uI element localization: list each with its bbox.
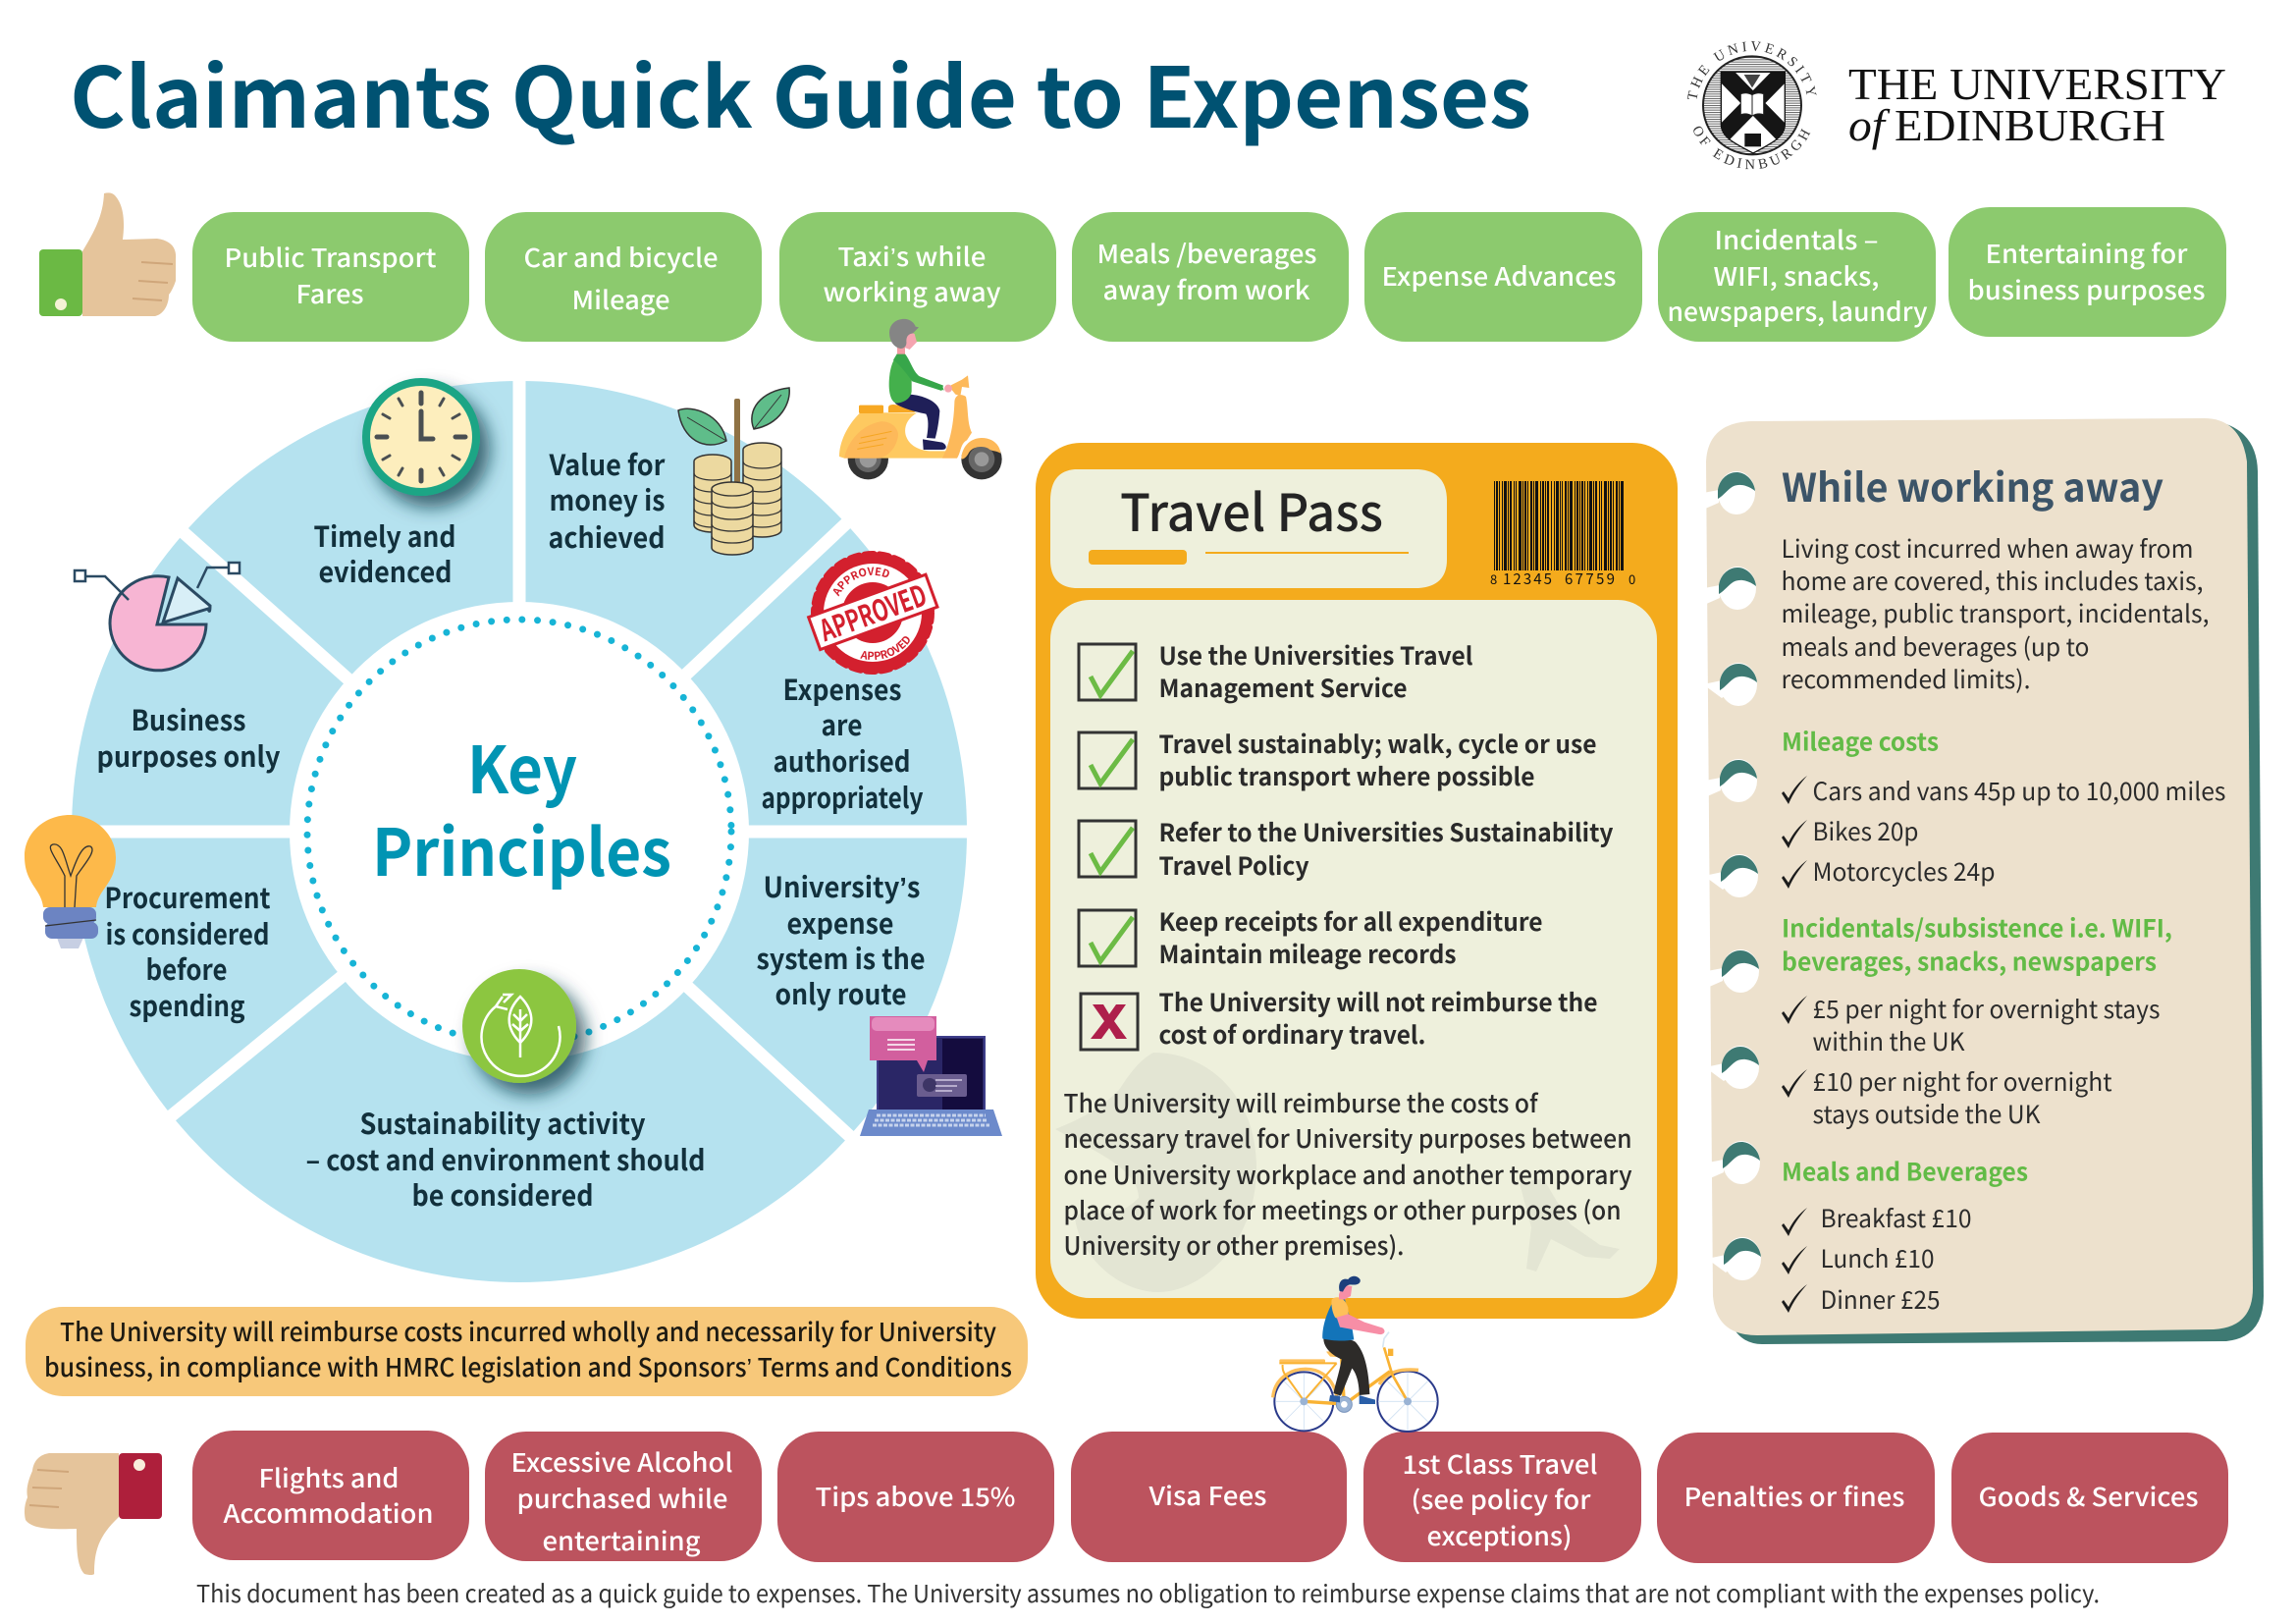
principle: procurement: spending bbox=[130, 984, 245, 1025]
pill: meals bbox=[1072, 212, 1349, 342]
notebook heading: While working away bbox=[1782, 457, 2163, 514]
pill: goods and services bbox=[1951, 1433, 2228, 1563]
logo wordmark: EDINBURGH bbox=[1895, 100, 2165, 150]
pill: first class bbox=[1363, 1432, 1641, 1562]
icon: coins and plant bbox=[678, 388, 789, 555]
icon: approved stamp: APPROVED bbox=[860, 636, 910, 660]
icon: university seal: THE UNIVERSITY bbox=[1686, 41, 1816, 99]
meals list bbox=[1782, 1200, 1971, 1317]
principle: timely and evidenced bbox=[314, 514, 455, 591]
pill: flights bbox=[192, 1431, 469, 1560]
heading: key principles bbox=[372, 719, 671, 895]
heading: key principles: Principles bbox=[372, 801, 671, 895]
item: travel management service bbox=[1079, 637, 1473, 705]
cyclist figure bbox=[1322, 1276, 1385, 1404]
icon: approved stamp: APPROVED bbox=[813, 571, 932, 650]
living cost paragraph: meals and beverages (up to bbox=[1781, 628, 2089, 664]
travel pass body bbox=[1050, 600, 1657, 1298]
pill: penalties: Penalties or fines bbox=[1684, 1478, 1904, 1514]
watermark: plane bbox=[1520, 1178, 1620, 1272]
meals list: Lunch £10 bbox=[1820, 1240, 1934, 1275]
watermark: globe bbox=[1055, 1053, 1256, 1292]
icon: leaf badge bbox=[462, 969, 576, 1083]
incidentals list: £10 per night for overnight bbox=[1812, 1063, 2112, 1099]
item: travel sustainably: Travel sustainably; walk, cycle or use bbox=[1158, 726, 1596, 761]
pill: public transport: Fares bbox=[296, 275, 363, 311]
pill: flights: Accommodation bbox=[224, 1494, 434, 1531]
item: ordinary travel not reimbursed bbox=[1081, 984, 1598, 1052]
principle: sustainability: be considered bbox=[412, 1173, 593, 1215]
principle: business purposes bbox=[96, 698, 281, 776]
barcode bbox=[1490, 526, 1635, 589]
principle: timely and evidenced: evidenced bbox=[318, 550, 452, 591]
mileage list: Cars and vans 45p up to 10,000 miles bbox=[1812, 773, 2226, 808]
title: Claimants Quick Guide to Expenses bbox=[70, 31, 1531, 152]
heading: incidentals: Incidentals/subsistence i.e. WIFI, bbox=[1782, 909, 2172, 945]
notebook rings bbox=[1703, 471, 1761, 1280]
principle: business purposes: Business bbox=[132, 698, 245, 739]
logo: University of Edinburgh bbox=[1686, 41, 2226, 169]
principle: expenses authorised bbox=[762, 668, 924, 817]
pill: entertaining: business purposes bbox=[1967, 271, 2205, 307]
barcode: 0 bbox=[1629, 569, 1635, 588]
incidentals list bbox=[1782, 991, 2160, 1131]
pill: alcohol: Excessive Alcohol bbox=[510, 1443, 732, 1480]
pill: incidentals: Incidentals – bbox=[1714, 221, 1879, 257]
panel: while working away notebook bbox=[1703, 418, 2264, 1344]
principle: expenses authorised: appropriately bbox=[762, 776, 924, 817]
principle: value for money bbox=[548, 443, 666, 557]
pill: first class: exceptions) bbox=[1427, 1517, 1573, 1553]
pill: tips bbox=[777, 1432, 1054, 1562]
pill: expense advances bbox=[1364, 212, 1642, 342]
pill: incidentals: newspapers, laundry bbox=[1667, 293, 1928, 329]
principle: sustainability: – cost and environment should bbox=[306, 1138, 705, 1179]
pill: incidentals bbox=[1658, 212, 1936, 342]
item: travel sustainably bbox=[1079, 726, 1596, 793]
panel: travel pass bbox=[1036, 443, 1678, 1319]
pill: alcohol bbox=[485, 1432, 762, 1561]
living cost paragraph: recommended limits). bbox=[1781, 661, 2030, 696]
icon: pie chart bbox=[75, 563, 240, 671]
living cost paragraph: Living cost incurred when away from bbox=[1781, 530, 2193, 566]
bicycle bbox=[1273, 1332, 1438, 1432]
pill: flights: Flights and bbox=[259, 1459, 399, 1495]
pill: car and bicycle bbox=[485, 212, 762, 342]
pill: public transport: Public Transport bbox=[224, 239, 436, 275]
principle: expenses authorised: Expenses bbox=[783, 668, 901, 709]
travel pass header bbox=[1050, 469, 1447, 588]
living cost paragraph: home are covered, this includes taxis, bbox=[1781, 563, 2203, 598]
living cost paragraph: mileage, public transport, incidentals, bbox=[1781, 595, 2209, 630]
mileage list: Motorcycles 24p bbox=[1812, 853, 1995, 889]
item: ordinary travel not reimbursed: The University will not reimburse the bbox=[1158, 984, 1598, 1019]
pill: entertaining: Entertaining for bbox=[1985, 235, 2188, 271]
principle: sustainability bbox=[306, 1102, 705, 1215]
pill: visa fees: Visa Fees bbox=[1148, 1477, 1266, 1513]
icon: approved stamp bbox=[807, 551, 939, 675]
barcode: 8 bbox=[1490, 569, 1497, 588]
principle: expense system: University’s bbox=[764, 865, 921, 906]
pill: taxis bbox=[779, 212, 1056, 342]
heading: meals and beverages: Meals and Beverages bbox=[1782, 1153, 2028, 1188]
pill: taxis: working away bbox=[823, 273, 1001, 309]
panel: reimbursement note: The University will reimburse costs incurred wholly and necessarily for University bbox=[60, 1313, 996, 1349]
icon: university seal bbox=[1686, 41, 1816, 169]
pill: car and bicycle: Mileage bbox=[571, 281, 669, 317]
meals list: Dinner £25 bbox=[1820, 1281, 1940, 1317]
panel: reimbursement note bbox=[26, 1307, 1028, 1396]
travel reimbursement paragraph: The University will reimburse the costs of bbox=[1064, 1084, 1539, 1120]
wheel segments bbox=[59, 363, 982, 1282]
not allowed expenses row bbox=[192, 1431, 2228, 1563]
pill: first class: 1st Class Travel bbox=[1402, 1445, 1598, 1482]
logo wordmark: of bbox=[1848, 100, 1891, 150]
pill: meals: away from work bbox=[1103, 271, 1310, 307]
heading: mileage costs: Mileage costs bbox=[1782, 723, 1939, 758]
principle: sustainability: Sustainability activity bbox=[359, 1102, 646, 1143]
icon: cyclist bbox=[1273, 1276, 1438, 1432]
item: keep receipts: Maintain mileage records bbox=[1158, 936, 1457, 971]
travel reimbursement paragraph: University or other premises). bbox=[1064, 1226, 1404, 1263]
principle: procurement bbox=[104, 876, 271, 1025]
pill: penalties bbox=[1657, 1433, 1935, 1563]
pill: goods and services: Goods & Services bbox=[1979, 1478, 2199, 1514]
pill: expense advances: Expense Advances bbox=[1382, 257, 1616, 294]
principle: value for money: Value for bbox=[549, 443, 666, 484]
icon: light bulb bbox=[25, 815, 116, 948]
principle: procurement: before bbox=[145, 947, 228, 989]
heading: key principles: Key bbox=[467, 719, 577, 813]
principle: value for money: money is bbox=[550, 478, 666, 519]
item: travel management service: Management Service bbox=[1158, 670, 1408, 705]
allowed expenses row bbox=[192, 207, 2226, 342]
scooter bbox=[839, 375, 1002, 479]
icon: laptop with chat bubble bbox=[860, 1016, 1002, 1136]
pill: alcohol: entertaining bbox=[542, 1522, 701, 1558]
logo wordmark: THE UNIVERSITY bbox=[1848, 59, 2226, 109]
heading: incidentals: beverages, snacks, newspapers bbox=[1782, 943, 2157, 978]
principle: expenses authorised: authorised bbox=[774, 739, 911, 781]
barcode: 67759 bbox=[1565, 568, 1615, 589]
heading: incidentals bbox=[1782, 909, 2172, 978]
logo wordmark bbox=[1848, 59, 2226, 150]
item: sustainability policy bbox=[1079, 814, 1614, 883]
icon: thumbs down bbox=[25, 1453, 162, 1575]
icon: scooter rider bbox=[839, 319, 1002, 479]
item: keep receipts: Keep receipts for all expenditure bbox=[1158, 903, 1543, 939]
icon: clock bbox=[362, 378, 480, 496]
panel: reimbursement note: business, in compliance with HMRC legislation and Sponsors’ Terms and Conditions bbox=[44, 1348, 1012, 1384]
pill: tips: Tips above 15% bbox=[815, 1478, 1015, 1514]
travel reimbursement paragraph bbox=[1064, 1084, 1632, 1263]
principle: expense system: expense bbox=[787, 901, 893, 943]
travel reimbursement paragraph: place of work for meetings or other purposes (on bbox=[1064, 1191, 1622, 1227]
pill: first class: (see policy for bbox=[1412, 1481, 1591, 1517]
item: travel management service: Use the Universities Travel bbox=[1158, 637, 1473, 673]
item: keep receipts bbox=[1079, 903, 1543, 971]
icon: approved stamp: APPROVED bbox=[832, 568, 889, 597]
incidentals list: stays outside the UK bbox=[1812, 1096, 2041, 1131]
principle: procurement: Procurement bbox=[104, 876, 271, 917]
travel reimbursement paragraph: one University workplace and another temporary bbox=[1064, 1156, 1632, 1192]
footer disclaimer: This document has been created as a quick guide to expenses. The University assumes no obligation to reimburse expense claims that are not compliant with the expenses policy. bbox=[196, 1576, 2100, 1610]
principle: expense system: system is the bbox=[756, 937, 925, 978]
principle: timely and evidenced: Timely and bbox=[314, 514, 455, 556]
item: ordinary travel not reimbursed: cost of ordinary travel. bbox=[1158, 1016, 1425, 1052]
pill: alcohol: purchased while bbox=[516, 1480, 728, 1516]
pill: public transport bbox=[192, 212, 469, 342]
principle: procurement: is considered bbox=[106, 912, 269, 953]
incidentals list: within the UK bbox=[1812, 1023, 1965, 1058]
icon: thumbs up bbox=[39, 192, 176, 316]
mileage list bbox=[1782, 773, 2226, 889]
item: sustainability policy: Travel Policy bbox=[1158, 847, 1309, 883]
travel pass header: Travel Pass bbox=[1120, 472, 1383, 546]
barcode: 12345 bbox=[1503, 568, 1552, 589]
meals list: Breakfast £10 bbox=[1820, 1200, 1971, 1235]
pill: meals: Meals /beverages bbox=[1097, 235, 1317, 271]
icon: university seal: OF EDINBURGH bbox=[1693, 126, 1810, 169]
item: sustainability policy: Refer to the Universities Sustainability bbox=[1158, 814, 1614, 849]
incidentals list: £5 per night for overnight stays bbox=[1812, 991, 2160, 1026]
principle: business purposes: purposes only bbox=[96, 734, 281, 776]
travel reimbursement paragraph: necessary travel for University purposes between bbox=[1064, 1119, 1631, 1156]
principle: expense system bbox=[756, 865, 925, 1013]
pill: entertaining bbox=[1949, 207, 2226, 337]
pill: car and bicycle: Car and bicycle bbox=[524, 239, 719, 275]
principle: value for money: achieved bbox=[548, 515, 666, 557]
pill: taxis: Taxi’s while bbox=[838, 238, 986, 274]
living cost paragraph bbox=[1781, 530, 2209, 696]
panel: key principles wheel bbox=[24, 376, 1002, 1282]
pill: visa fees bbox=[1071, 1432, 1347, 1562]
rider bbox=[889, 319, 952, 450]
pill: incidentals: WIFI, snacks, bbox=[1714, 257, 1879, 294]
mileage list: Bikes 20p bbox=[1812, 813, 1918, 848]
principle: expenses authorised: are bbox=[821, 703, 862, 744]
principle: expense system: only route bbox=[775, 972, 907, 1013]
item: travel sustainably: public transport where possible bbox=[1158, 758, 1535, 793]
